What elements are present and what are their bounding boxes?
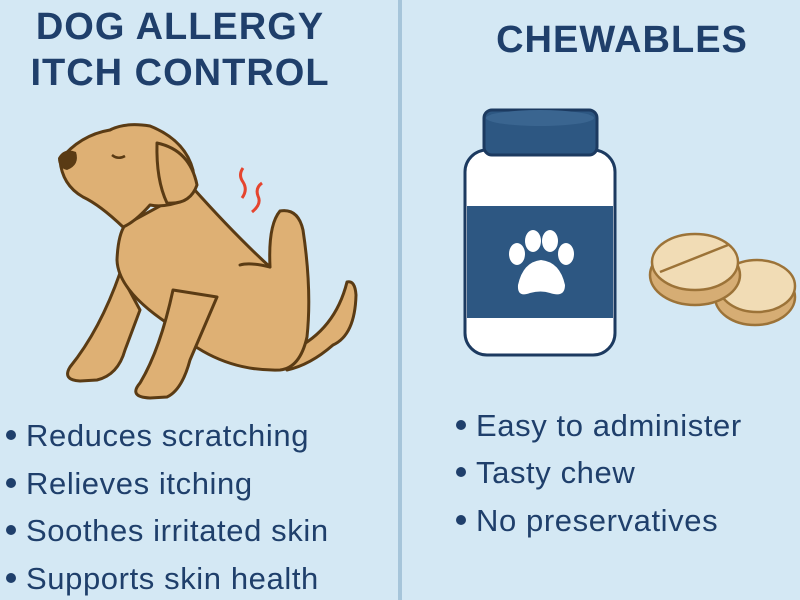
illustration: itching dog <box>58 123 358 400</box>
illustration: chewable tablets <box>648 232 796 326</box>
bullets: right <box>456 408 742 538</box>
bullets: left: Reduces scratching <box>26 418 309 453</box>
bullets: right: Easy to administer <box>476 408 742 443</box>
bullets: right: Tasty chew <box>476 455 635 490</box>
title: left: ITCH CONTROL <box>30 52 330 94</box>
bullets: right: No preservatives <box>476 503 718 538</box>
bullets: left: Relieves itching <box>26 466 253 501</box>
bullets: left: Soothes irritated skin <box>26 513 329 548</box>
title: right: CHEWABLES <box>496 19 748 61</box>
divider <box>398 0 402 600</box>
bullets: left <box>6 418 329 596</box>
title: left <box>30 6 330 94</box>
illustration: bottle <box>464 108 616 356</box>
title: left: DOG ALLERGY <box>36 6 324 48</box>
bullets: left: Supports skin health <box>26 561 319 596</box>
